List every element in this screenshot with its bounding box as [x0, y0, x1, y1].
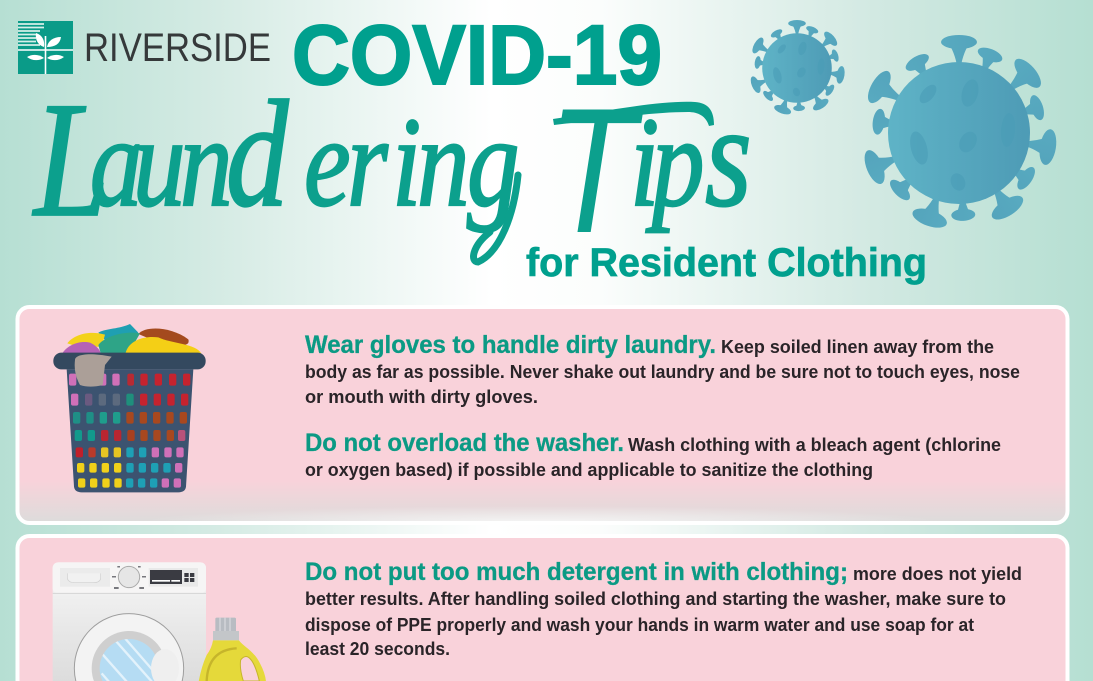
- title: Laundering script: u: [133, 92, 186, 233]
- title: Tips script: [548, 72, 752, 271]
- text: detergent: dispose of PPE properly and wash your hands in warm water and use soap for at: [305, 615, 974, 635]
- icon: small virus: [749, 20, 846, 116]
- title: Tips script: i: [630, 92, 659, 233]
- panel: gloves and washer load: [18, 307, 1068, 523]
- subtitle: for Resident Clothing: [526, 241, 927, 285]
- title: Laundering script: i: [392, 92, 421, 233]
- text: detergent: better results. After handling soiled clothing and starting the washer, make sure to: [305, 589, 1006, 609]
- panel: detergent: [18, 536, 1068, 681]
- text: wear gloves: body as far as possible. Never shake out laundry and be sure not to touch eyes, nose: [305, 362, 1020, 382]
- text: wear gloves: Keep soiled linen away from the: [721, 337, 994, 357]
- text: detergent: least 20 seconds.: [305, 639, 450, 659]
- title: Laundering script: r: [347, 92, 388, 233]
- icon: laundry basket: [53, 324, 206, 492]
- text: do not overload: [305, 429, 1001, 480]
- title: Laundering script: e: [304, 92, 351, 233]
- text: wear gloves: or mouth with dirty gloves.: [305, 387, 538, 407]
- title: Laundering script: n: [417, 92, 470, 233]
- text: detergent: [305, 558, 1022, 659]
- title: Tips script: T: [548, 72, 643, 271]
- icon: washing machine and detergent: [53, 562, 266, 681]
- text: do not overload: or oxygen based) if possible and applicable to sanitize the clothing: [305, 460, 873, 480]
- logo: Riverside: [18, 21, 271, 74]
- logo wordmark: RIVERSIDE: [84, 26, 271, 70]
- title: Tips script: s: [705, 75, 752, 237]
- text: do not overload: Wash clothing with a bleach agent (chlorine: [628, 435, 1001, 455]
- title: Laundering script: g: [467, 92, 520, 233]
- text: wear gloves: [305, 331, 1020, 407]
- title: Tips script: p: [646, 92, 705, 233]
- icon: large virus: [860, 35, 1059, 232]
- title: COVID-19: COVID-19: [292, 8, 662, 102]
- text: detergent: Do not put too much detergent in with clothing;: [305, 558, 848, 586]
- title: Laundering script: n: [180, 92, 233, 233]
- title: Laundering script: a: [90, 92, 143, 233]
- text: detergent: more does not yield: [853, 564, 1022, 584]
- text: do not overload: Do not overload the washer.: [305, 429, 624, 457]
- title: Laundering script: d: [226, 70, 290, 239]
- text: wear gloves: Wear gloves to handle dirty laundry.: [305, 331, 716, 359]
- title: Laundering script: [32, 68, 520, 262]
- title: Laundering script: L: [32, 68, 109, 251]
